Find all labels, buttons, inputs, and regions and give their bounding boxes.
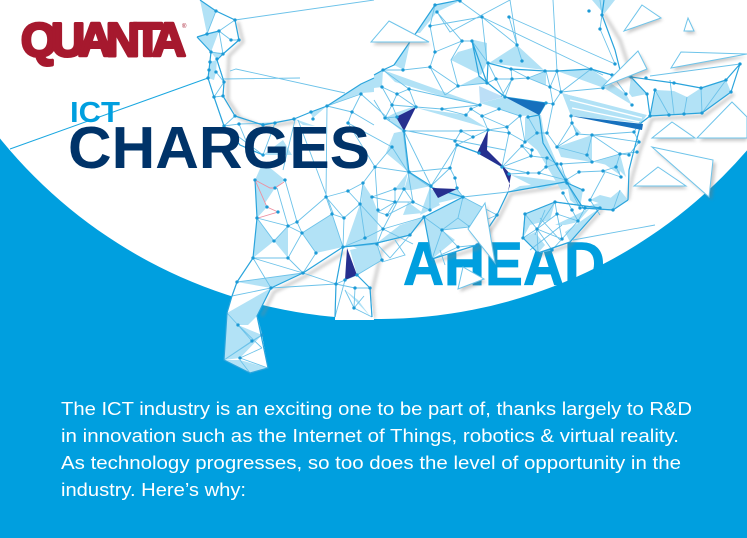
intro paragraph: As technology progresses, so too does the level of opportunity in the: [61, 453, 681, 473]
intro paragraph: industry. Here’s why:: [61, 480, 246, 500]
bright mesh edges: [197, 0, 740, 373]
intro paragraph: [61, 399, 692, 500]
thin mesh lines: [207, 0, 740, 373]
network illustration: [10, 0, 747, 373]
pale facet: [479, 86, 504, 103]
pink edges: [255, 180, 284, 218]
white base shapes over the blue field and AHEAD: [224, 187, 600, 373]
white stripes: [568, 94, 644, 122]
dark navy facets: [345, 107, 511, 280]
heading: CHARGES: CHARGES: [68, 115, 370, 181]
logo registered mark: ®: [182, 23, 187, 30]
heading: AHEAD: AHEAD: [403, 230, 605, 298]
logo: QUANTA: QUANTA: [21, 13, 186, 66]
heading: ICT: ICT: [70, 97, 120, 129]
floating white triangles: [371, 5, 747, 289]
intro paragraph: in innovation such as the Internet of Things, robotics & virtual reality.: [61, 426, 679, 446]
mid blue facets: [505, 97, 643, 130]
intro paragraph: The ICT industry is an exciting one to be part of, thanks largely to R&D: [61, 399, 692, 419]
background: white circle: [0, 0, 747, 319]
bright long line: [10, 78, 208, 149]
network shadows: [228, 14, 734, 318]
light blue facets: [197, 0, 731, 373]
network nodes: [207, 1, 740, 358]
floating triangle shadows: [373, 8, 747, 292]
